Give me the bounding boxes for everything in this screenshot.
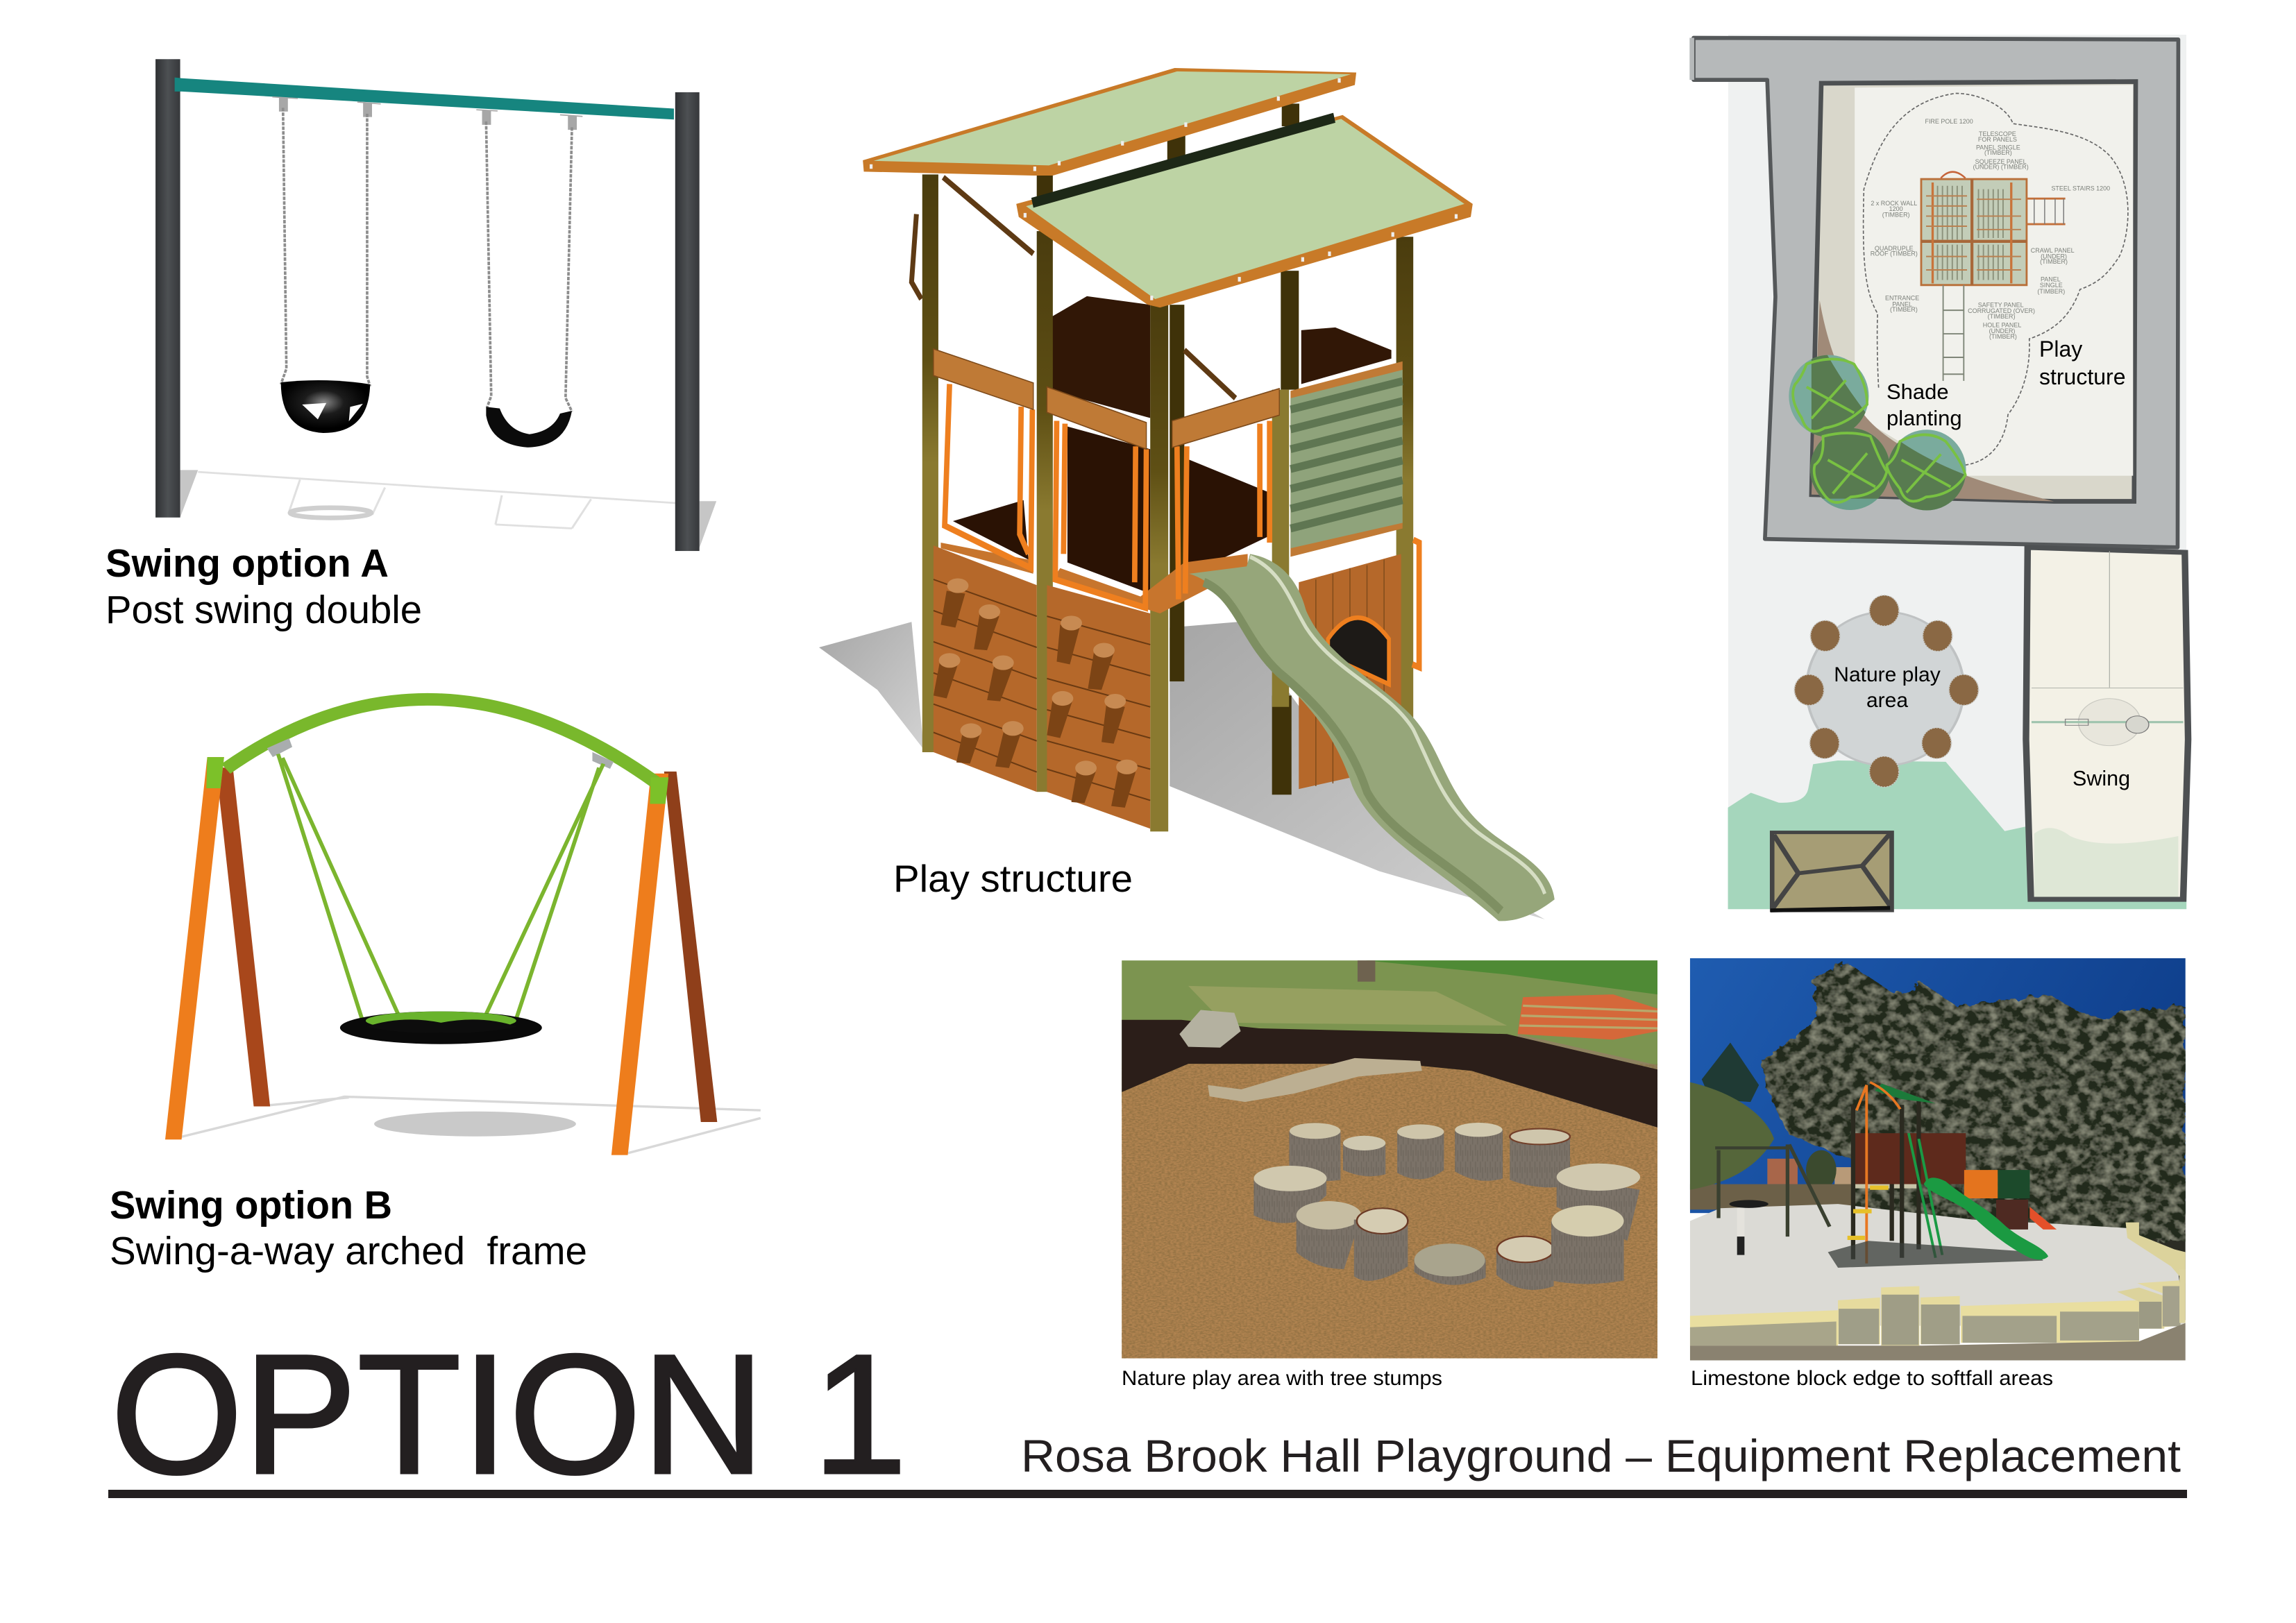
plan annotations (1871, 118, 2110, 340)
corrugated panel (1290, 362, 1403, 556)
swing option B illustration (165, 699, 761, 1155)
plan annotations: 1200 (1889, 205, 1903, 212)
playground in photo (1828, 1082, 2057, 1268)
swing A caption (105, 541, 422, 632)
plan annotations: SQUEEZE PANEL (1975, 158, 2027, 165)
upright posts (922, 174, 1413, 831)
rope rails (911, 178, 1235, 398)
plan annotations: 2 x ROCK WALL (1871, 200, 1917, 207)
orange fence (1517, 994, 1657, 1069)
plan annotations: FOR PANELS (1978, 136, 2017, 143)
plan annotations: (UNDER) (1989, 328, 2015, 334)
plan label: shade planting: Shade (1886, 380, 1949, 404)
timber rail bands (934, 349, 1279, 449)
tree stumps ring (1253, 1123, 1640, 1290)
plan annotations: PANEL (1892, 300, 1912, 307)
site plan (1692, 35, 2188, 910)
swing chains (281, 108, 572, 411)
plan annotations: STEEL STAIRS 1200 (2051, 185, 2110, 192)
play structure footprint dashed outline (1864, 94, 2128, 465)
plan annotations: (UNDER) (TIMBER) (1973, 163, 2029, 171)
plan label: nature play area: Nature play (1834, 663, 1941, 686)
arched frame (206, 699, 668, 804)
corrugated ridge (1032, 118, 1335, 203)
site plan background (1728, 35, 2186, 909)
swing A description: Post swing double (105, 588, 422, 632)
swing B description: Swing-a-way arched frame (110, 1229, 587, 1273)
nature play circle (1807, 612, 1964, 765)
plan label: shade planting: planting (1886, 406, 1962, 430)
plan annotations: ROOF (TIMBER) (1871, 250, 1918, 257)
play structure plan drawing (1921, 172, 2066, 381)
photo: nature play area (1122, 960, 1657, 1359)
caption: nature play: Nature play area with tree stumps (1122, 1367, 1442, 1390)
dark ground under trees (1855, 1178, 2186, 1320)
plan annotations: (TIMBER) (1890, 306, 1918, 313)
limestone wall (1690, 1269, 2186, 1345)
plan annotations: (TIMBER) (2040, 258, 2068, 265)
swing set in photo (1715, 1144, 1830, 1237)
grey path surround (1694, 38, 2178, 547)
play structure illustration (819, 68, 1555, 921)
timber floor (940, 543, 1248, 613)
slide (1189, 554, 1555, 921)
swing B title: Swing option B (110, 1183, 392, 1227)
plan label: nature play area: area (1866, 689, 1908, 712)
rear legs (216, 767, 717, 1122)
plan annotations: (TIMBER) (2037, 288, 2065, 295)
lower plan: nature play and swing (1728, 547, 2188, 910)
wood chips (1122, 1064, 1657, 1359)
grass background (1122, 960, 1657, 1102)
plan annotations: (TIMBER) (1989, 333, 2017, 340)
teal top bar (175, 78, 674, 119)
plan label: play structure: structure (2039, 364, 2125, 389)
sandpit (1771, 833, 1891, 910)
softfall surface (1812, 82, 2136, 501)
right post (675, 92, 700, 551)
belt seat (486, 407, 572, 448)
plan annotations: (UNDER) (2041, 253, 2067, 260)
plan annotations: FIRE POLE 1200 (1925, 118, 1973, 125)
main title: OPTION 1 (110, 1319, 907, 1510)
white sand softfall (1690, 1204, 2186, 1326)
tree stumps plan (1794, 595, 1979, 787)
title rule (108, 1490, 2187, 1498)
caption: limestone: Limestone block edge to softfall areas (1691, 1367, 2053, 1390)
blue sky (1690, 958, 2186, 1213)
distant limestone blocks (2126, 1223, 2186, 1283)
climbing holds (934, 578, 1138, 808)
plan label: swing: Swing (2073, 767, 2130, 790)
ground shadow B (178, 1096, 761, 1153)
plan annotations: (TIMBER) (1984, 149, 2012, 156)
swing B caption (110, 1183, 587, 1273)
plan annotations: HOLE PANEL (1983, 321, 2021, 328)
plan annotations: PANEL (2041, 275, 2061, 282)
bucket seat (281, 380, 370, 433)
ground shadows (819, 622, 1545, 919)
tree canopy (1761, 963, 2186, 1241)
play structure label: Play structure (893, 857, 1133, 900)
foreground dirt (1690, 1323, 2186, 1360)
tree trunk (1358, 960, 1375, 982)
plan annotations: (TIMBER) (1882, 211, 1910, 218)
plan annotations: PANEL SINGLE (1976, 144, 2020, 151)
plan annotations: (TIMBER) (1988, 313, 2015, 320)
driftwood log (1208, 1058, 1422, 1102)
trees shade planting (1789, 355, 1967, 511)
front roof (1016, 115, 1473, 307)
plan annotations: TELESCOPE (1979, 130, 2016, 137)
ground shadow A (180, 470, 716, 548)
subtitle: Rosa Brook Hall Playground – Equipment Replacement (1021, 1430, 2181, 1481)
swing option A illustration (155, 59, 716, 551)
rear dark posts (1037, 103, 1299, 794)
pine and left trees (1690, 1042, 1774, 1190)
boulder (1179, 1010, 1241, 1048)
dark interior (953, 296, 1392, 593)
plan label: play structure: Play (2039, 337, 2082, 362)
plan annotations: SINGLE (2040, 282, 2063, 289)
plan annotations: CORRUGATED (OVER) (1968, 307, 2035, 314)
climbing wall panels (934, 545, 1150, 829)
swing A title: Swing option A (105, 541, 389, 586)
orange handrails (945, 384, 1419, 668)
nest seat (340, 1012, 542, 1044)
plan annotations: CRAWL PANEL (2031, 247, 2075, 254)
dark mulch band (1122, 1020, 1657, 1128)
upper plan: play structure area (1692, 38, 2178, 547)
swing hangers (272, 97, 582, 129)
front legs (165, 757, 668, 1155)
plan annotations: ENTRANCE (1885, 295, 1919, 302)
garden bed wedge (1812, 300, 2054, 501)
plan annotations: QUADRUPLE (1875, 245, 1914, 252)
swing softfall plot (2026, 547, 2188, 899)
left post (155, 59, 180, 518)
ropes (278, 754, 603, 1026)
lower entry panel (1299, 554, 1401, 789)
photo: limestone block edge (1690, 958, 2186, 1360)
plan annotations: SAFETY PANEL (1978, 301, 2024, 308)
spring rider (1730, 1200, 1769, 1255)
back roof (863, 68, 1356, 176)
background houses strip (1690, 1150, 1855, 1209)
lawn green area (1728, 760, 2186, 909)
